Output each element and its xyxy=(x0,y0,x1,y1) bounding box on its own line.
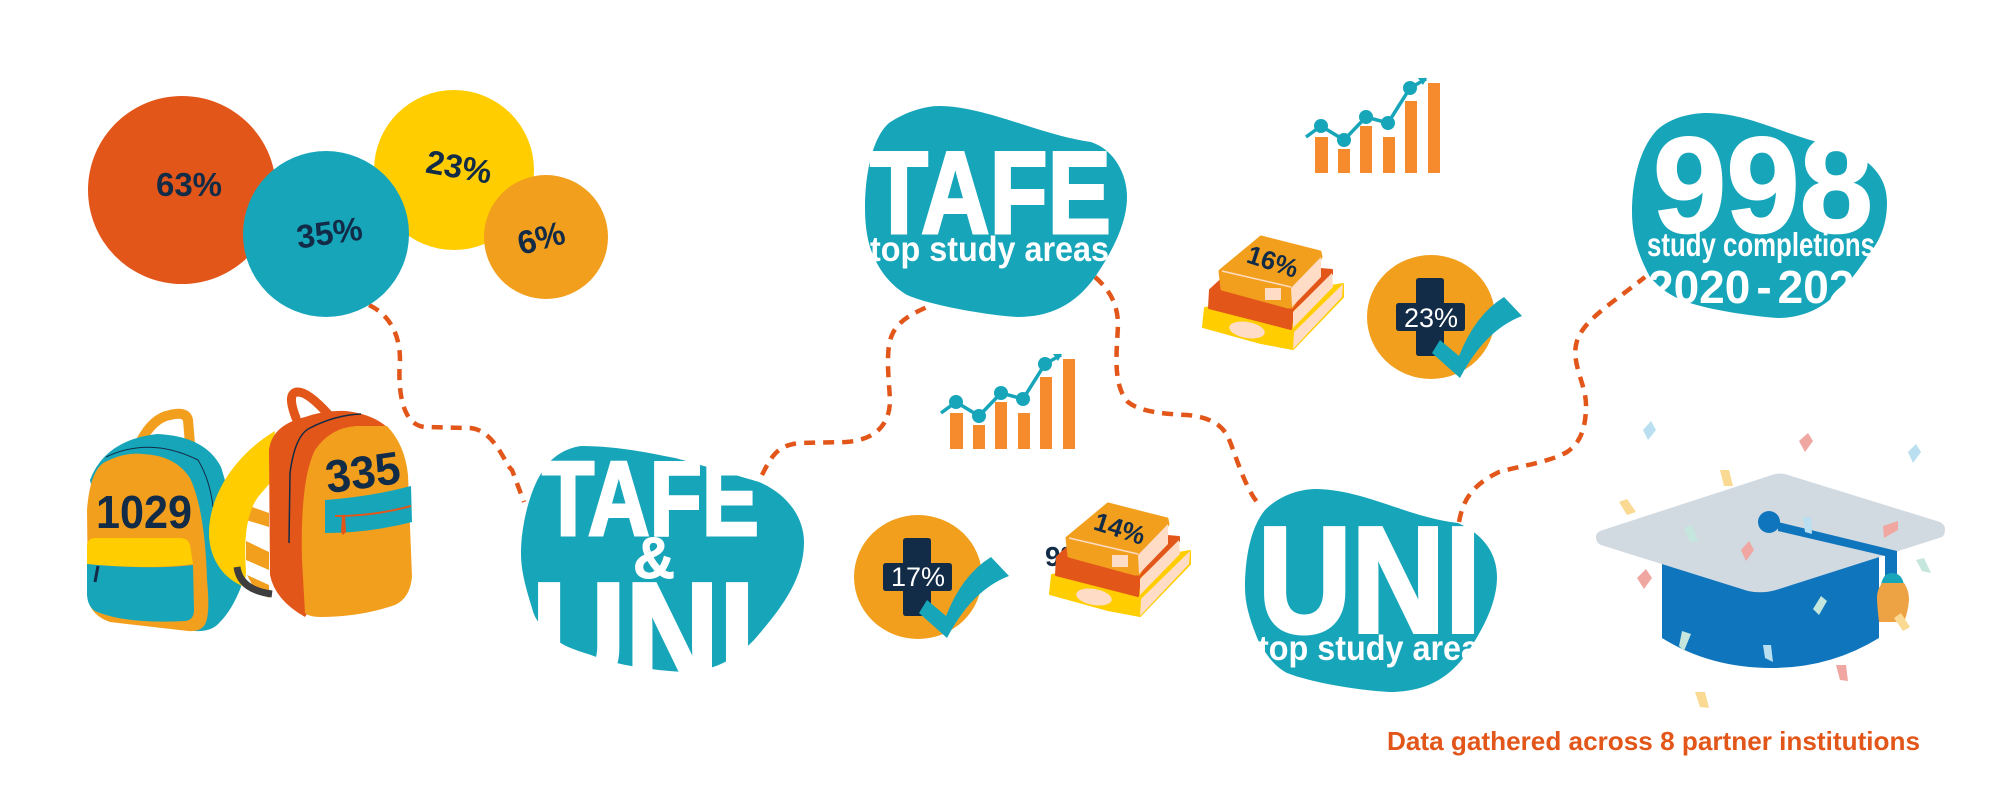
icon: graduation cap with confetti xyxy=(1596,421,1945,708)
icon: medical cross 23% with tick: 23% xyxy=(1404,303,1458,333)
bubble: 6% xyxy=(484,175,608,299)
bubble: 63%: 63% xyxy=(156,166,222,203)
books: 16% xyxy=(1203,237,1343,349)
blob: 998 study completions xyxy=(1632,109,1887,318)
books: 14%: 14% xyxy=(1090,506,1149,551)
bubble: 35% xyxy=(243,151,409,317)
bubble: 6%: 6% xyxy=(513,214,569,262)
backpack straps xyxy=(209,431,275,598)
backpack: 1029: 1029 xyxy=(96,486,192,538)
blob: TAFE top study areas xyxy=(865,106,1127,317)
caption: Data gathered across 8 partner institutions xyxy=(1387,726,1920,756)
subheading: top study areas xyxy=(1258,629,1497,668)
blob: TAFE and UNI xyxy=(521,440,804,720)
confetti xyxy=(1619,421,1931,708)
books: 14% xyxy=(1050,504,1190,616)
label: study completions: study completions xyxy=(1647,226,1875,263)
label: hidden 9% behind books: 9% xyxy=(1045,541,1086,572)
connector: TAFE to UNI xyxy=(1095,277,1261,507)
backpack: 335 xyxy=(269,392,412,617)
backpacks xyxy=(87,392,412,631)
bubble chart: percentages xyxy=(88,90,608,317)
bubble: 23% xyxy=(374,90,534,250)
heading: ampersand: & xyxy=(633,526,675,591)
blob: UNI top study areas xyxy=(1245,489,1497,692)
connector: UNI to completions xyxy=(1459,277,1645,522)
number: 998: 998 xyxy=(1653,109,1873,261)
books: 16%: 16% xyxy=(1243,239,1302,284)
heading: UNI: UNI xyxy=(532,551,755,720)
heading: TAFE: TAFE xyxy=(870,127,1111,258)
backpack: 1029 xyxy=(87,414,241,631)
cap body xyxy=(1662,555,1879,668)
cap button and cord xyxy=(1758,511,1897,577)
chart: rising bars top xyxy=(1306,78,1440,173)
connector: TAFE and UNI to TAFE xyxy=(762,305,932,475)
tassel xyxy=(1877,573,1909,622)
chart: rising bars lower xyxy=(941,354,1075,449)
icon: medical cross 23% with tick xyxy=(1367,255,1522,379)
icon: medical cross 17% with tick: 17% xyxy=(891,562,945,592)
bubble: 63% xyxy=(88,96,276,284)
icon: medical cross 17% with tick xyxy=(854,515,1009,639)
bubble: 35%: 35% xyxy=(294,210,365,256)
subheading: top study areas xyxy=(870,230,1109,269)
heading: TAFE: TAFE xyxy=(542,440,759,558)
backpack: 335: 335 xyxy=(322,441,404,503)
bubble: 23%: 23% xyxy=(423,143,495,191)
heading: UNI: UNI xyxy=(1258,495,1481,664)
cap board xyxy=(1596,474,1945,592)
label: years: 2020-2021 xyxy=(1648,261,1880,313)
connector: circles to TAFE and UNI xyxy=(369,305,524,502)
